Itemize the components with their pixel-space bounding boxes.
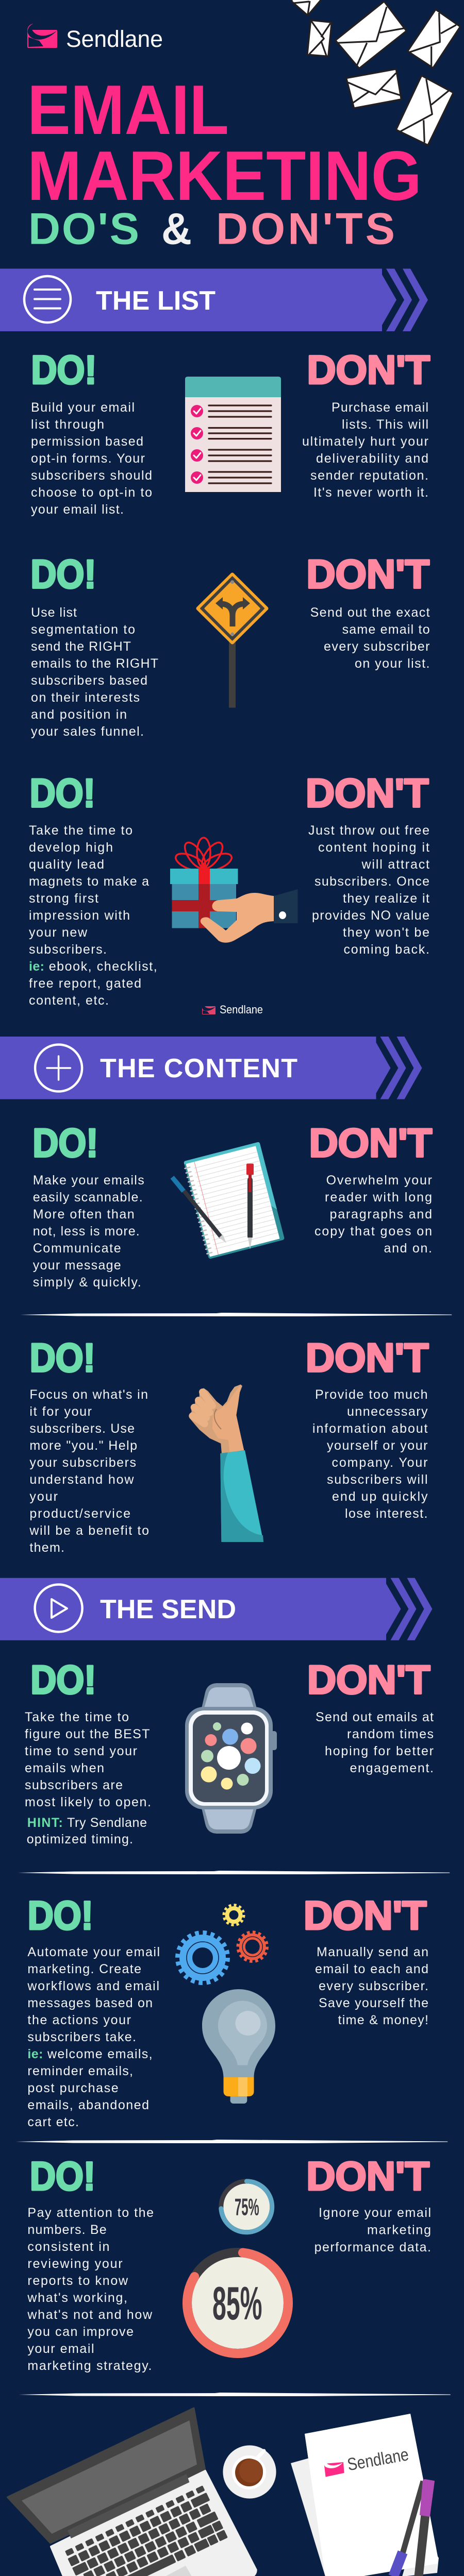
text: do: segmentation to bbox=[31, 622, 135, 637]
text: do: your sales funnel. bbox=[31, 724, 144, 739]
text: do: Pay attention to the bbox=[27, 2206, 154, 2220]
logo: Sendlane bbox=[27, 24, 163, 52]
text: do: on their interests bbox=[31, 690, 140, 705]
chart: 75% donut: 75% bbox=[235, 2193, 259, 2220]
text: do: your bbox=[29, 1489, 58, 1504]
text: don't: Send out emails at bbox=[316, 1710, 434, 1724]
text: don't: Overwhelm your bbox=[326, 1173, 432, 1188]
panel: list 3 bbox=[29, 770, 429, 1008]
text: do: what's not and how bbox=[27, 2308, 153, 2322]
text: don't: company. Your bbox=[332, 1455, 428, 1470]
text: don't: subscribers will bbox=[327, 1472, 428, 1487]
text: don't: sender reputation. bbox=[310, 468, 428, 483]
text: don't: Manually send an bbox=[317, 1945, 428, 1959]
text: don't: Save yourself the bbox=[319, 1996, 428, 2010]
icon: gears bbox=[178, 1905, 267, 1982]
logo: Sendlane: Sendlane bbox=[66, 26, 163, 52]
illustration: laptop bbox=[7, 2408, 256, 2576]
keyboard bbox=[64, 2485, 228, 2576]
logo: small Sendlane bbox=[202, 1003, 263, 1016]
text: do: Use list bbox=[31, 605, 77, 620]
text: do: content, etc. bbox=[29, 993, 109, 1008]
text: do: reports to know bbox=[27, 2274, 128, 2288]
illustration: coffee cup bbox=[223, 2445, 276, 2499]
text: don't: Purchase email bbox=[332, 400, 428, 415]
text: do bbox=[29, 1387, 149, 1555]
text: don't: time & money! bbox=[338, 2013, 428, 2027]
text: don't bbox=[316, 1710, 434, 1775]
text: don't: email to each and bbox=[315, 1962, 428, 1976]
text: do: ie: bbox=[29, 959, 44, 974]
divider bbox=[15, 2140, 448, 2143]
text: do: figure out the BEST bbox=[25, 1727, 150, 1741]
text: don't: lists. This will bbox=[342, 417, 428, 432]
panel: send 1 bbox=[25, 1657, 434, 1846]
divider bbox=[20, 1313, 452, 1316]
text: do: not, less is more. bbox=[33, 1224, 140, 1239]
heading: do: DO! bbox=[30, 1657, 96, 1702]
heading: don't: DON'T bbox=[306, 770, 429, 816]
text: don't: information about bbox=[312, 1421, 428, 1436]
text: don't: performance data. bbox=[314, 2240, 431, 2255]
icon: play bbox=[35, 1585, 82, 1632]
chart: 85% donut bbox=[187, 2252, 288, 2353]
icon: road sign bbox=[198, 574, 267, 708]
text: do: marketing strategy. bbox=[27, 2359, 152, 2373]
icon: smartwatch bbox=[185, 1683, 277, 1834]
text: don't bbox=[315, 1945, 428, 2027]
text: don't: unnecessary bbox=[347, 1404, 428, 1419]
text: do: subscribers are bbox=[25, 1778, 123, 1792]
text: do: it for your bbox=[29, 1404, 92, 1419]
text: do: them. bbox=[29, 1540, 64, 1555]
text: do: choose to opt-in to bbox=[31, 485, 152, 500]
text: do: send the RIGHT bbox=[31, 639, 131, 654]
divider bbox=[19, 2393, 451, 2396]
text: do: Try Sendlane bbox=[67, 1816, 147, 1830]
text: don't: random times bbox=[347, 1727, 434, 1741]
illustration: papers and pens bbox=[291, 2414, 439, 2576]
panel: list 2 bbox=[31, 551, 430, 739]
text: do: what's working, bbox=[27, 2291, 127, 2305]
text: do: Take the time to bbox=[25, 1710, 129, 1724]
text: do: consistent in bbox=[27, 2240, 109, 2254]
icon: checklist bbox=[185, 377, 281, 492]
title: EMAIL bbox=[27, 71, 229, 149]
text: don't: every subscriber. bbox=[319, 1979, 428, 1993]
text: don't bbox=[310, 605, 430, 671]
text: do: more "you." Help bbox=[29, 1438, 137, 1453]
banner: the list bbox=[0, 269, 428, 331]
text: do: subscribers. bbox=[29, 942, 107, 957]
text: do: your email bbox=[27, 2342, 94, 2356]
heading: do: DO! bbox=[30, 1335, 95, 1380]
title: MARKETING bbox=[27, 137, 422, 215]
text: do: Make your emails bbox=[33, 1173, 144, 1188]
text: don't: lose interest. bbox=[345, 1506, 428, 1521]
text: do: easily scannable. bbox=[33, 1190, 143, 1205]
title: DO'S bbox=[28, 204, 139, 253]
text: do bbox=[31, 605, 158, 739]
icon: thumbs up bbox=[189, 1384, 263, 1542]
text: do bbox=[25, 1710, 151, 1846]
heading: don't: DON'T bbox=[307, 347, 430, 393]
heading: don't: DON'T bbox=[306, 551, 429, 597]
icon: plus bbox=[35, 1045, 82, 1091]
text: do: Build your email bbox=[31, 400, 135, 415]
text: don't: yourself or your bbox=[327, 1438, 428, 1453]
text: don't bbox=[314, 1173, 432, 1256]
heading: don't: DON'T bbox=[304, 1892, 427, 1938]
text: don't bbox=[302, 400, 428, 500]
heading: do: DO! bbox=[32, 1120, 98, 1165]
text: do: subscribers. Use bbox=[29, 1421, 135, 1436]
text: do: Automate your email bbox=[27, 1945, 160, 1959]
text: do: simply & quickly. bbox=[33, 1275, 141, 1290]
text: do: opt-in forms. Your bbox=[31, 451, 145, 466]
text: don't: hoping for better bbox=[325, 1744, 434, 1758]
text: do: strong first bbox=[29, 891, 98, 906]
logo: small Sendlane: Sendlane bbox=[220, 1003, 263, 1016]
text: don't: reader with long bbox=[325, 1190, 432, 1205]
text: don't: engagement. bbox=[350, 1761, 434, 1775]
text: do: subscribers based bbox=[31, 673, 147, 688]
icon: flying envelopes bbox=[292, 0, 460, 145]
icon: menu bbox=[24, 276, 71, 323]
text: do: emails when bbox=[25, 1761, 104, 1775]
heading: don't: DON'T bbox=[309, 1120, 432, 1165]
text: do: ie: bbox=[27, 2047, 43, 2061]
text: don't: Provide too much bbox=[315, 1387, 428, 1402]
text: don't: on your list. bbox=[355, 656, 430, 671]
text: do: reminder emails, bbox=[27, 2064, 133, 2078]
text: do: will be a benefit to bbox=[29, 1523, 149, 1538]
text: do bbox=[27, 2206, 154, 2373]
text: do: you can improve bbox=[27, 2325, 134, 2339]
text: do: emails to the RIGHT bbox=[31, 656, 158, 671]
panel: content 2 bbox=[29, 1335, 428, 1555]
text: don't: and on. bbox=[384, 1241, 432, 1256]
heading: do: DO! bbox=[30, 2154, 95, 2199]
logo: Sendlane on paper: Sendlane bbox=[346, 2445, 410, 2475]
heading: do: DO! bbox=[31, 551, 96, 597]
panel: send 3 bbox=[27, 2154, 431, 2373]
text: don't: deliverability and bbox=[316, 451, 428, 466]
text: do bbox=[29, 823, 157, 1008]
icon: hand bbox=[201, 889, 298, 943]
heading: do: DO! bbox=[28, 1892, 93, 1938]
icon: light bulb bbox=[202, 1989, 275, 2104]
text: do: your email list. bbox=[31, 502, 124, 517]
text: do: numbers. Be bbox=[27, 2223, 107, 2237]
text: do bbox=[27, 1945, 160, 2129]
panel: content 1 bbox=[32, 1120, 432, 1290]
text: do: product/service bbox=[29, 1506, 130, 1521]
text: do: emails, abandoned bbox=[27, 2098, 149, 2112]
title bbox=[27, 71, 422, 253]
text: don't: coming back. bbox=[343, 942, 429, 957]
banner: the content bbox=[0, 1037, 422, 1099]
icon: notebook and pens bbox=[172, 1142, 285, 1259]
text: don't: marketing bbox=[367, 2223, 431, 2237]
heading: do: DO! bbox=[31, 347, 97, 393]
text: do: ebook, checklist, bbox=[49, 959, 157, 974]
divider bbox=[18, 1871, 450, 1874]
text: do bbox=[33, 1173, 144, 1290]
panel: send 2 bbox=[27, 1892, 428, 2129]
title: DON'TS bbox=[216, 204, 395, 253]
text: don't: copy that goes on bbox=[314, 1224, 432, 1239]
text: do: most likely to open. bbox=[25, 1795, 151, 1809]
logo: Sendlane on paper bbox=[324, 2445, 410, 2477]
text: do: the actions your bbox=[27, 2013, 131, 2027]
text: do: impression with bbox=[29, 908, 130, 923]
text: do: your message bbox=[33, 1258, 121, 1273]
chart: 85% donut: 85% bbox=[212, 2278, 262, 2330]
heading: don't: DON'T bbox=[306, 1335, 429, 1380]
text: do: workflows and email bbox=[27, 1979, 159, 1993]
text: do: quality lead bbox=[29, 857, 104, 872]
text: do: HINT: bbox=[27, 1816, 63, 1830]
title: & bbox=[161, 204, 192, 253]
text: don't: end up quickly bbox=[332, 1489, 428, 1504]
text: do: cart etc. bbox=[27, 2115, 79, 2129]
heading: do: DO! bbox=[30, 770, 95, 816]
heading: the send: THE SEND bbox=[100, 1595, 236, 1624]
text: do: and position in bbox=[31, 707, 127, 722]
text: do: Communicate bbox=[33, 1241, 121, 1256]
text: do: understand how bbox=[29, 1472, 134, 1487]
text: do: reviewing your bbox=[27, 2257, 123, 2271]
heading: don't: DON'T bbox=[306, 2154, 429, 2199]
text: don't: paragraphs and bbox=[330, 1207, 432, 1222]
text: do: Take the time to bbox=[29, 823, 132, 838]
text: don't: provides NO value bbox=[312, 908, 429, 923]
text: don't: It's never worth it. bbox=[313, 485, 428, 500]
text: don't bbox=[314, 2206, 431, 2255]
text: do: develop high bbox=[29, 840, 113, 855]
text: don't: they won't be bbox=[343, 925, 429, 940]
text: don't: Just throw out free bbox=[308, 823, 429, 838]
text: do: subscribers should bbox=[31, 468, 152, 483]
text: do: list through bbox=[31, 417, 104, 432]
banner: the send bbox=[0, 1578, 432, 1640]
text: don't: content hoping it bbox=[318, 840, 429, 855]
text: do: optimized timing. bbox=[27, 1832, 133, 1846]
text: do: time to send your bbox=[25, 1744, 137, 1758]
text: don't: same email to bbox=[342, 622, 430, 637]
text: do: your new bbox=[29, 925, 88, 940]
text: do: marketing. Create bbox=[27, 1962, 141, 1976]
text: don't: Send out the exact bbox=[310, 605, 430, 620]
text: do bbox=[31, 400, 152, 517]
text: don't: ultimately hurt your bbox=[302, 434, 428, 449]
text: do: subscribers take. bbox=[27, 2030, 136, 2044]
text: don't: Ignore your email bbox=[319, 2206, 431, 2220]
text: do: Focus on what's in bbox=[29, 1387, 148, 1402]
text: do: your subscribers bbox=[29, 1455, 136, 1470]
icon: gift bbox=[170, 838, 298, 943]
text: do: magnets to make a bbox=[29, 874, 149, 889]
text: don't: will attract bbox=[361, 857, 429, 872]
text: do: free report, gated bbox=[29, 976, 141, 991]
text: don't: subscribers. Once bbox=[314, 874, 429, 889]
text: don't: every subscriber bbox=[324, 639, 430, 654]
heading: the content: THE CONTENT bbox=[100, 1054, 297, 1083]
text: do: permission based bbox=[31, 434, 143, 449]
heading: don't: DON'T bbox=[307, 1657, 430, 1702]
text: do: messages based on bbox=[27, 1996, 153, 2010]
text: do: post purchase bbox=[27, 2081, 119, 2095]
chart: 75% donut bbox=[221, 2181, 272, 2232]
text: do: welcome emails, bbox=[47, 2047, 153, 2061]
heading: the list: THE LIST bbox=[96, 286, 216, 316]
text: do: More often than bbox=[33, 1207, 135, 1222]
text: don't bbox=[308, 823, 429, 957]
panel: list 1 bbox=[31, 347, 430, 517]
text: don't: they realize it bbox=[343, 891, 429, 906]
text: don't bbox=[312, 1387, 428, 1521]
